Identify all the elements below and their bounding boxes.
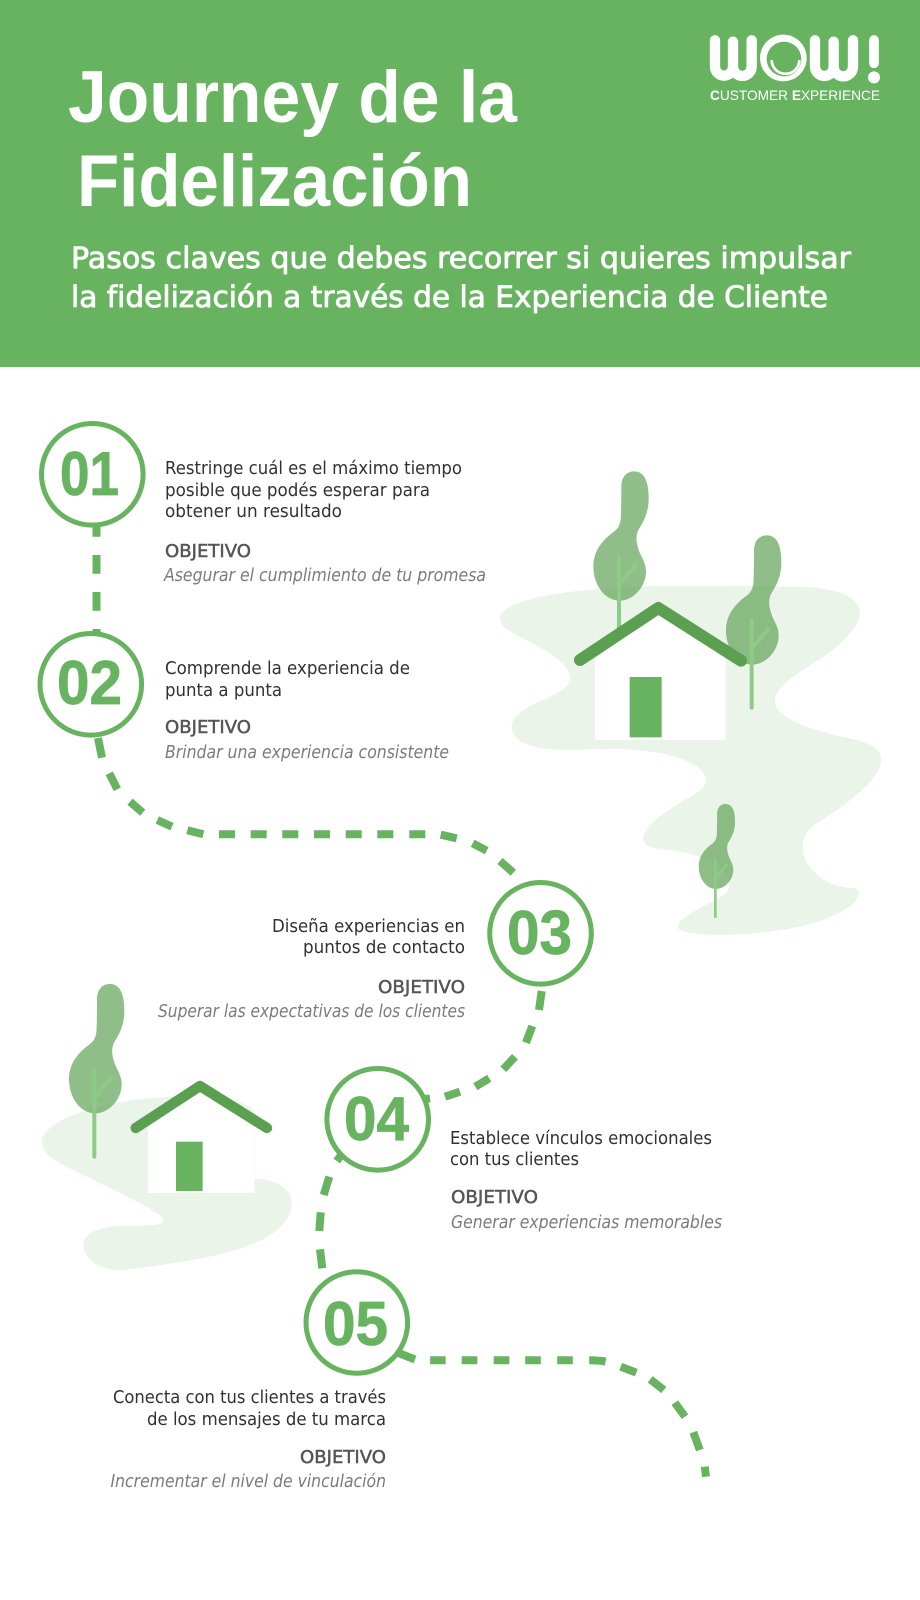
tree 1 [593, 471, 649, 630]
step 03 objective: OBJETIVO [378, 977, 465, 998]
step 04 objective: Generar experiencias memorables [451, 1212, 722, 1233]
tree [69, 984, 124, 1157]
step 04 objective [451, 1187, 722, 1233]
dashed path: 02 to 03 [98, 738, 513, 873]
logo: WOW! Customer Experience: CUSTOMER EXPERIENCE [710, 87, 880, 103]
title [68, 55, 518, 222]
background blob [500, 586, 881, 935]
number badge 04: 04 [344, 1085, 409, 1154]
title: Fidelización [77, 139, 472, 222]
step 02 description [165, 658, 410, 701]
step 03 objective: Superar las expectativas de los clientes [158, 1001, 465, 1022]
number badge 05: 05 [323, 1290, 388, 1359]
step 01 objective: Asegurar el cumplimiento de tu promesa [163, 565, 486, 586]
dashed path: 05 to end [396, 1352, 706, 1477]
tree 2 [726, 535, 781, 708]
step 01 description: posible que podés esperar para [165, 480, 430, 501]
step 03 objective [158, 977, 465, 1022]
header panel [0, 0, 920, 367]
subtitle [71, 241, 852, 314]
step 02 objective: OBJETIVO [165, 717, 251, 738]
number badge 05 [306, 1272, 408, 1373]
step 05 objective: OBJETIVO [300, 1447, 386, 1468]
background blob [42, 1097, 292, 1270]
house [580, 608, 741, 740]
step 05 [110, 1272, 408, 1492]
step 04 description [450, 1128, 712, 1170]
number badge 01: 01 [60, 440, 119, 509]
house [136, 1086, 267, 1193]
number badge 02 [40, 634, 142, 735]
subtitle: Pasos claves que debes recorrer si quieres impulsar [71, 241, 852, 275]
step 01 objective [163, 541, 486, 586]
logo: WOW! Customer Experience [710, 35, 880, 103]
step 01 objective: OBJETIVO [165, 541, 251, 562]
number badge 03: 03 [507, 899, 572, 968]
step 02 objective [165, 717, 449, 763]
number badge 03 [490, 882, 591, 984]
illustration: bottom-left house scene [42, 984, 292, 1270]
step 05 description: Conecta con tus clientes a través [113, 1387, 386, 1408]
step 03 description: Diseña experiencias en [272, 916, 465, 937]
step 05 description [113, 1387, 386, 1430]
tree 3 [699, 804, 735, 917]
step 02 description: Comprende la experiencia de [165, 658, 410, 679]
step 01 description: obtener un resultado [165, 501, 342, 522]
step 02 [40, 634, 449, 763]
step 05 objective: Incrementar el nivel de vinculación [110, 1471, 386, 1492]
illustration: top-right house scene [500, 471, 881, 935]
number badge 04 [327, 1068, 429, 1170]
title: Journey de la [68, 55, 518, 138]
number badge 02: 02 [57, 649, 122, 718]
step 05 description: de los mensajes de tu marca [147, 1409, 386, 1430]
step 03 [158, 882, 591, 1022]
step 04 description: con tus clientes [450, 1149, 579, 1170]
dashed path: 04 to 05 [319, 1150, 345, 1268]
step 04 objective: OBJETIVO [451, 1187, 538, 1208]
subtitle: la fidelización a través de la Experiencia de Cliente [71, 280, 828, 314]
step 04 description: Establece vínculos emocionales [450, 1128, 712, 1149]
number badge 01 [42, 424, 143, 525]
step 03 description [272, 916, 465, 958]
step 01 [42, 424, 486, 586]
step 05 objective [110, 1447, 386, 1492]
step 02 description: punta a punta [165, 680, 282, 701]
step 03 description: puntos de contacto [303, 937, 465, 958]
dashed path: 03 to 04 [420, 991, 542, 1100]
step 01 description [165, 458, 462, 522]
step 04 [327, 1068, 722, 1233]
step 02 objective: Brindar una experiencia consistente [165, 742, 449, 763]
dashed path: 01 to 02 [92, 518, 100, 640]
step 01 description: Restringe cuál es el máximo tiempo [165, 458, 462, 479]
